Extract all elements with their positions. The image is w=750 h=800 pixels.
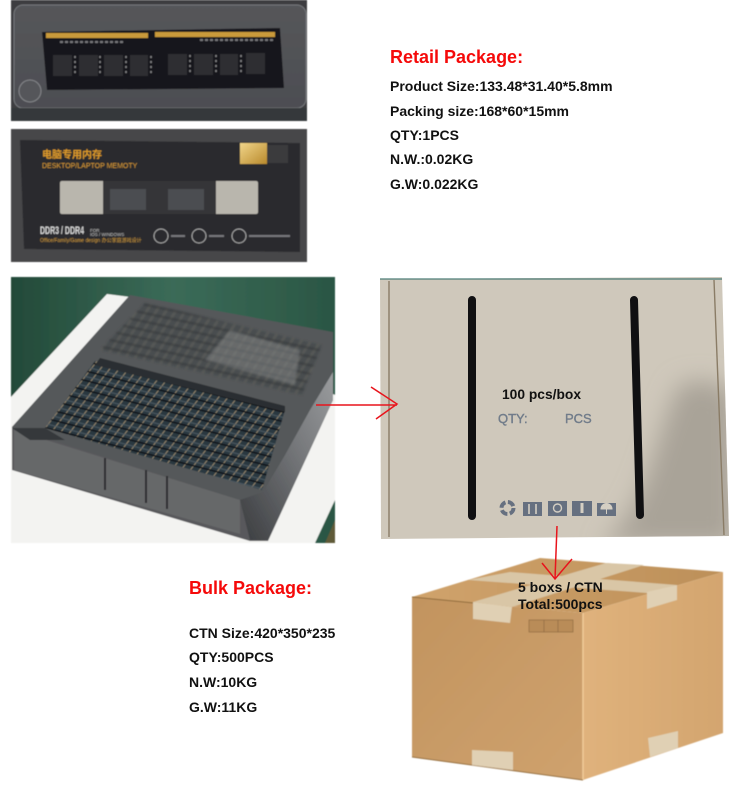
box handling icons — [502, 501, 616, 516]
bulk package specifications: CTN Size:420*350*235 — [189, 625, 336, 641]
box shadow — [600, 381, 735, 545]
box quantity label: QTY: — [498, 411, 528, 426]
retail package specifications: Packing size:168*60*15mm — [390, 103, 569, 119]
photo: retail box — [11, 129, 307, 262]
box footer text: Office/Family/Game design 办公家庭游戏设计 — [40, 237, 142, 244]
box heading — [42, 148, 138, 170]
box footer text: FOR — [90, 228, 100, 233]
carton quantity label: Total:500pcs — [518, 596, 603, 612]
photo: shipping carton — [412, 558, 723, 780]
retail package specifications: N.W.:0.02KG — [390, 151, 473, 167]
box quantity label: PCS — [565, 411, 592, 426]
gold authenticity badge — [240, 143, 288, 164]
box handle slots — [472, 300, 640, 516]
box heading: DESKTOP/LAPTOP MEMOTY — [42, 163, 138, 170]
lower tray of modules — [45, 361, 285, 490]
box footer text — [40, 225, 142, 244]
retail package specifications: G.W:0.022KG — [390, 176, 479, 192]
box window — [60, 181, 258, 214]
carton handling icons — [529, 620, 573, 632]
box footer text: IOS / WINDOWS — [90, 232, 124, 237]
heading: bulk package: Bulk Package: — [189, 578, 312, 598]
bulk package specifications — [189, 625, 336, 715]
bulk package specifications: G.W:11KG — [189, 699, 257, 715]
bulk package specifications: QTY:500PCS — [189, 649, 274, 665]
heading: retail package: Retail Package: — [390, 47, 523, 67]
upper tray of modules — [100, 303, 322, 395]
memory module board — [42, 28, 284, 90]
photo: memory module in blister tray — [11, 0, 307, 121]
box quantity label: 100 pcs/box — [502, 387, 581, 402]
retail package specifications: Product Size:133.48*31.40*5.8mm — [390, 78, 613, 94]
carton tape — [468, 563, 678, 770]
box feature icons — [154, 229, 290, 243]
bulk package specifications: N.W:10KG — [189, 674, 257, 690]
arrow: inner box to carton — [542, 526, 572, 579]
box footer text: DDR3 / DDR4 — [40, 225, 85, 237]
retail package specifications — [390, 78, 613, 192]
photo: inner shipping box — [380, 277, 735, 545]
carton quantity label: 5 boxs / CTN — [518, 579, 603, 595]
photo: stacked modules in tray — [11, 277, 335, 543]
box heading: 电脑专用内存 — [42, 148, 102, 161]
carton quantity label — [518, 579, 603, 612]
box quantity label — [498, 387, 592, 426]
retail package specifications: QTY:1PCS — [390, 127, 459, 143]
arrow: tray to inner box — [316, 387, 397, 419]
